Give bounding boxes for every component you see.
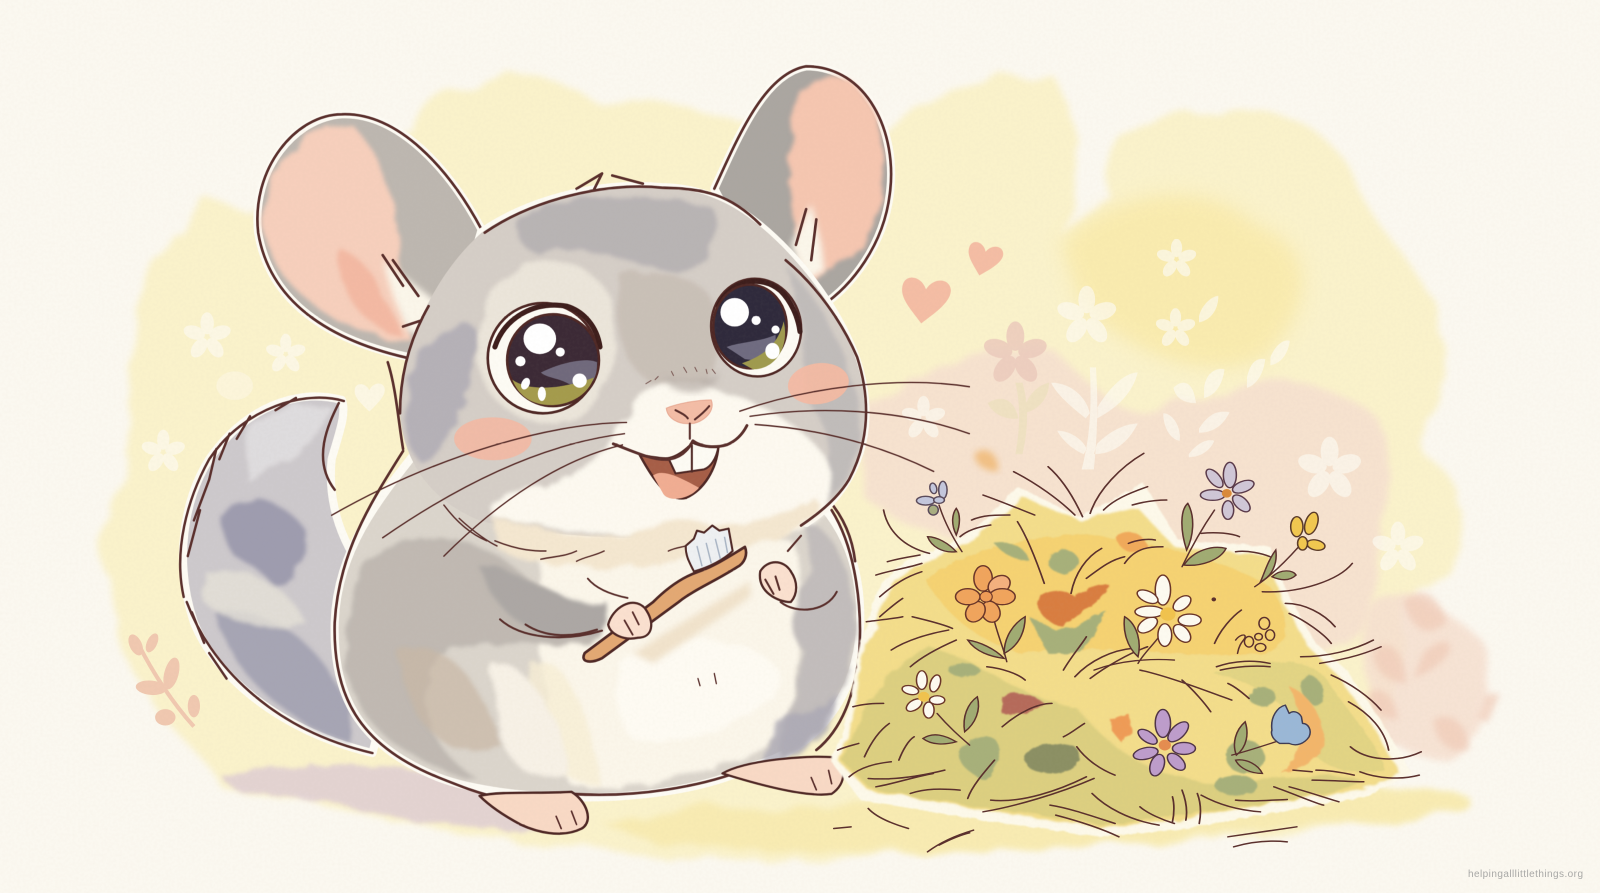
nose bridge grey [663, 372, 719, 392]
right sclera [703, 272, 809, 384]
yellow wash [104, 71, 1469, 863]
pale flower 8 [1370, 521, 1425, 574]
stem and leaves [928, 508, 959, 552]
daisy leaves [1124, 617, 1139, 657]
pale blot left [216, 371, 253, 400]
small doodle flower [1236, 617, 1275, 653]
left foot [480, 792, 588, 834]
dark olive patch [1025, 744, 1079, 773]
brush handle [583, 547, 746, 662]
orange flower stem and leaves [968, 617, 1025, 658]
teeth [668, 443, 718, 473]
grey left flank [345, 538, 602, 781]
chinchilla body [335, 408, 860, 798]
head [332, 173, 969, 567]
whiskers right [740, 383, 969, 471]
white daisy [1094, 575, 1201, 670]
belly cream [538, 517, 803, 788]
arm grey [480, 566, 607, 638]
ear fur [791, 204, 824, 281]
pale heart [355, 384, 385, 412]
ear pink deep [337, 245, 403, 337]
bristle lines [697, 537, 728, 566]
daisy center [1160, 607, 1176, 621]
right arm curve [765, 536, 837, 610]
body silhouette [335, 408, 860, 797]
pale flower 2 [265, 334, 307, 374]
right iris lavender [727, 335, 776, 360]
ear pink [264, 124, 413, 343]
bristles [686, 526, 733, 571]
hay pile [830, 453, 1421, 852]
handle shadow [633, 582, 750, 663]
right ear [714, 66, 891, 306]
nose bridge beige [619, 274, 717, 389]
olive right [1213, 662, 1385, 772]
tail fill [183, 397, 408, 753]
ear fill [714, 66, 891, 306]
muzzle white [490, 383, 831, 537]
hay halo [830, 483, 1412, 837]
ear pink [789, 77, 885, 284]
ear outline [257, 114, 482, 361]
left ear [257, 114, 482, 361]
left foot fill [480, 792, 588, 834]
left hand [608, 603, 651, 639]
tongue [653, 473, 699, 499]
ear fur [383, 260, 454, 342]
pink leaf sprig left [125, 631, 200, 727]
whisker dots [646, 367, 715, 384]
right eye [703, 272, 809, 384]
grey cheek left [406, 324, 480, 461]
grey right of head [786, 265, 862, 510]
right iris gold [742, 321, 785, 369]
chest fluff cream [490, 500, 820, 567]
pale flower 9 [900, 396, 947, 440]
pink leaf plant right [1367, 593, 1500, 751]
hay strokes [834, 453, 1421, 852]
tail outline [180, 398, 372, 753]
pale flower 7 [1296, 437, 1363, 501]
stem and leaves [1182, 503, 1226, 565]
golden top [926, 533, 1285, 655]
left iris [507, 314, 599, 406]
tail [180, 397, 408, 753]
right highlights [720, 298, 780, 359]
ear outline [714, 66, 891, 306]
pink wash lower right [1367, 599, 1488, 760]
pale flower 6 [1154, 308, 1197, 348]
center [918, 692, 929, 702]
yellow petals [1291, 511, 1326, 552]
pale leaves [1051, 296, 1290, 469]
green patches [949, 543, 1328, 795]
purple flower [1132, 709, 1195, 777]
faint green leaves [988, 383, 1049, 454]
background watercolor wash [104, 71, 1500, 863]
fingers [588, 579, 639, 635]
pale flower 3 [140, 430, 187, 474]
right iris [713, 285, 787, 368]
head fill [400, 187, 865, 538]
toothbrush [500, 526, 750, 663]
light around left eye [478, 261, 616, 424]
yellow flower [1255, 511, 1326, 587]
orange flower petals [956, 566, 1015, 625]
whiskers left [332, 422, 627, 556]
bright belly [616, 640, 781, 742]
right hand fill [760, 562, 796, 602]
blue flower [1232, 705, 1310, 773]
right foot [722, 757, 843, 795]
ground wash [602, 788, 1469, 853]
blue-grey small flower [916, 481, 962, 552]
purple petals [1132, 709, 1195, 777]
center [1159, 740, 1171, 750]
ear fill [257, 114, 482, 359]
warm belly tint [520, 662, 602, 786]
blue petals [1271, 705, 1310, 745]
right hand [760, 536, 837, 610]
chest fur strokes [444, 505, 694, 561]
stem and leaves [1260, 550, 1296, 582]
nostrils [676, 406, 709, 439]
center [1222, 489, 1232, 498]
left iris gold [512, 378, 594, 405]
pale flower 1 [182, 312, 233, 361]
orange leaf patches [1002, 532, 1324, 773]
right foot fill [722, 757, 843, 795]
cheek right [785, 359, 852, 408]
cheek left [454, 417, 532, 460]
orange flower [956, 566, 1025, 662]
lavender flower top [1182, 462, 1256, 567]
pale flower 5 [1155, 239, 1198, 279]
hearts [898, 240, 1005, 327]
left sclera [488, 303, 598, 413]
orange flower center [980, 591, 992, 602]
grey crown shading [516, 196, 716, 274]
body outline [335, 451, 860, 798]
left eye [488, 303, 600, 413]
tail stripes [204, 405, 352, 745]
blue-grey petals [916, 481, 947, 515]
pink wash right [867, 351, 1389, 649]
pale flowers in background [140, 239, 1425, 574]
nose [666, 400, 712, 424]
lavender petals [1200, 462, 1256, 519]
fur strokes [698, 673, 716, 686]
small daisy petals [901, 671, 945, 718]
stem and leaves [923, 697, 979, 744]
brown flank [398, 648, 500, 751]
watermark: helpingalllittlethings.org [1468, 869, 1583, 880]
open mouth [640, 447, 718, 498]
right flank grey [781, 520, 855, 760]
stem and leaves [1234, 722, 1262, 773]
big heart [898, 275, 952, 327]
left arm curve [500, 619, 602, 637]
lavender lower right [760, 694, 842, 767]
hay yellow base [838, 497, 1400, 827]
right upper lid [718, 281, 800, 332]
small heart [963, 240, 1005, 280]
left iris lavender [541, 360, 597, 387]
pale flower 4 [1055, 286, 1118, 346]
hay speck [1211, 597, 1216, 601]
toes [811, 770, 832, 790]
white hip patch [490, 662, 571, 779]
daisy petals [1134, 575, 1201, 646]
left highlights [515, 323, 587, 401]
head halo [482, 187, 865, 522]
toes [556, 811, 577, 829]
pink flower behind hay [981, 321, 1049, 386]
orange blot [974, 450, 998, 471]
small daisy [901, 671, 979, 745]
deeper yellow patch upper right [1061, 195, 1302, 368]
head outline [388, 173, 866, 526]
smile line [613, 426, 747, 459]
lavender ground shadow [222, 765, 551, 830]
olive lower layer [841, 647, 1366, 823]
left upper lid [495, 305, 600, 347]
